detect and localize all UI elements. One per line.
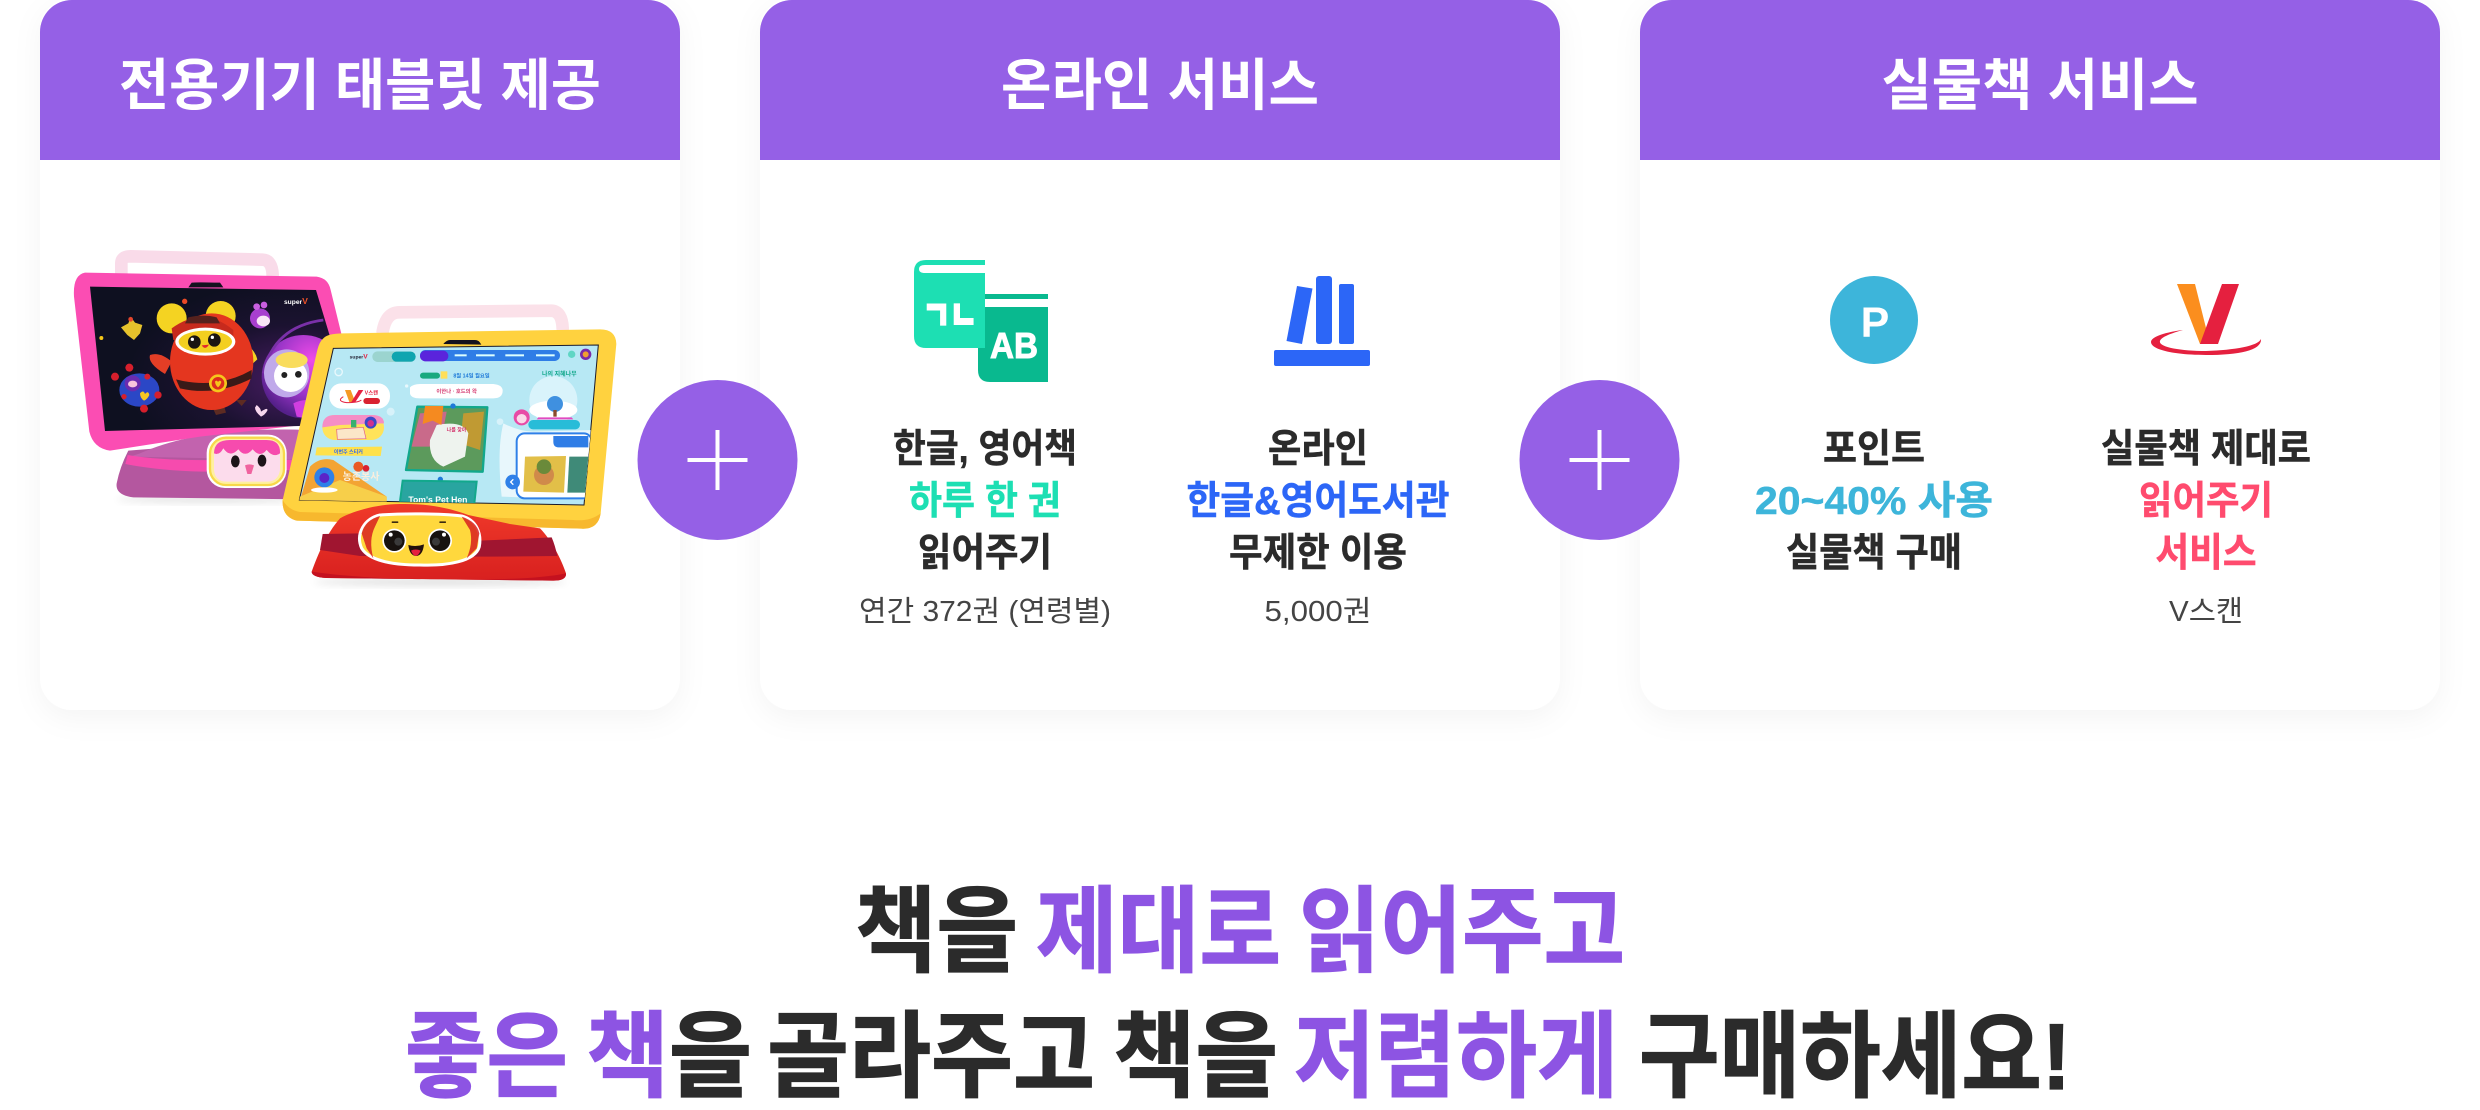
illustration: yellow tablet: 이한나 · 호드의 왁	[436, 387, 477, 395]
text: unlimited online library: 온라인	[1268, 428, 1368, 471]
closing headline: 제대로	[1036, 879, 1281, 984]
icon: plus connector 2	[1520, 380, 1680, 540]
illustration: yellow tablet: 나를 찾아	[447, 427, 467, 434]
text: daily book reading: 읽어주기	[918, 532, 1052, 575]
icon: bookshelf	[1274, 276, 1370, 366]
text: V scan reading service	[2101, 428, 2311, 628]
icon: Korean and English books	[914, 260, 1048, 382]
closing headline: 구매하세요!	[1639, 1004, 2071, 1109]
closing headline: 책을	[855, 879, 1018, 984]
text: V scan reading service: 서비스	[2156, 532, 2256, 575]
text: points purchase	[1755, 428, 1993, 575]
header: dedicated tablet: 전용기기 태블릿 제공	[119, 54, 601, 117]
header: online service	[760, 0, 1560, 160]
text: daily book reading: 연간 372권 (연령별)	[859, 596, 1111, 628]
header: physical book service	[1640, 0, 2440, 160]
text: unlimited online library	[1186, 428, 1450, 628]
illustration: yellow tablet: superV	[350, 354, 368, 361]
illustration: pink tablet: superV	[284, 296, 308, 306]
panel: physical book service	[1640, 0, 2440, 710]
icon: point coin: P	[1861, 299, 1889, 347]
icon: plus connector 1	[638, 380, 798, 540]
illustration: yellow tablet	[283, 311, 616, 585]
closing headline: 저렴하게	[1294, 1004, 1618, 1109]
text: V scan reading service: 읽어주기	[2139, 480, 2273, 523]
icon: Korean and English books: ㄱㄴ	[923, 296, 977, 338]
text: unlimited online library: 5,000권	[1264, 596, 1372, 628]
text: V scan reading service: V스캔	[2169, 595, 2243, 628]
closing headline: 책을	[1113, 1004, 1278, 1109]
header: online service: 온라인 서비스	[1001, 54, 1319, 117]
header: physical book service: 실물책 서비스	[1882, 54, 2198, 117]
closing headline: 골라주고	[767, 1004, 1095, 1109]
text: points purchase: 포인트	[1823, 428, 1925, 471]
illustration: yellow tablet: 8월 14일 월요일	[453, 371, 490, 379]
illustration: yellow tablet: 나의 지혜나무	[542, 370, 577, 378]
illustration: yellow tablet: V스캔	[365, 389, 378, 397]
illustration: yellow tablet: 농촌봉사	[343, 470, 379, 483]
icon: Korean and English books: AB	[990, 325, 1038, 366]
panel: online service	[760, 0, 1560, 710]
text: unlimited online library: 무제한 이용	[1229, 532, 1407, 575]
text: daily book reading: 하루 한 권	[909, 480, 1061, 523]
icon: V scan logo	[2151, 284, 2261, 355]
closing headline: 을	[669, 1004, 752, 1109]
text: unlimited online library: 한글&영어도서관	[1186, 480, 1450, 523]
icon: point coin	[1830, 276, 1918, 364]
text: daily book reading	[859, 428, 1111, 628]
text: points purchase: 실물책 구매	[1786, 532, 1962, 575]
text: points purchase: 20~40% 사용	[1755, 480, 1993, 523]
closing headline: 읽어주고	[1299, 879, 1625, 984]
closing headline: 책	[586, 1004, 669, 1109]
header: dedicated tablet	[40, 0, 680, 160]
illustration: yellow tablet: Tom's Pet Hen	[408, 495, 467, 505]
closing headline	[405, 879, 2071, 1109]
closing headline: 좋은	[405, 1004, 568, 1109]
panel: dedicated tablet	[40, 0, 680, 588]
text: daily book reading: 한글, 영어책	[893, 428, 1077, 471]
text: V scan reading service: 실물책 제대로	[2101, 428, 2311, 471]
illustration: yellow tablet: 이번주 스티커	[334, 448, 363, 455]
illustration: pink tablet	[74, 256, 347, 503]
